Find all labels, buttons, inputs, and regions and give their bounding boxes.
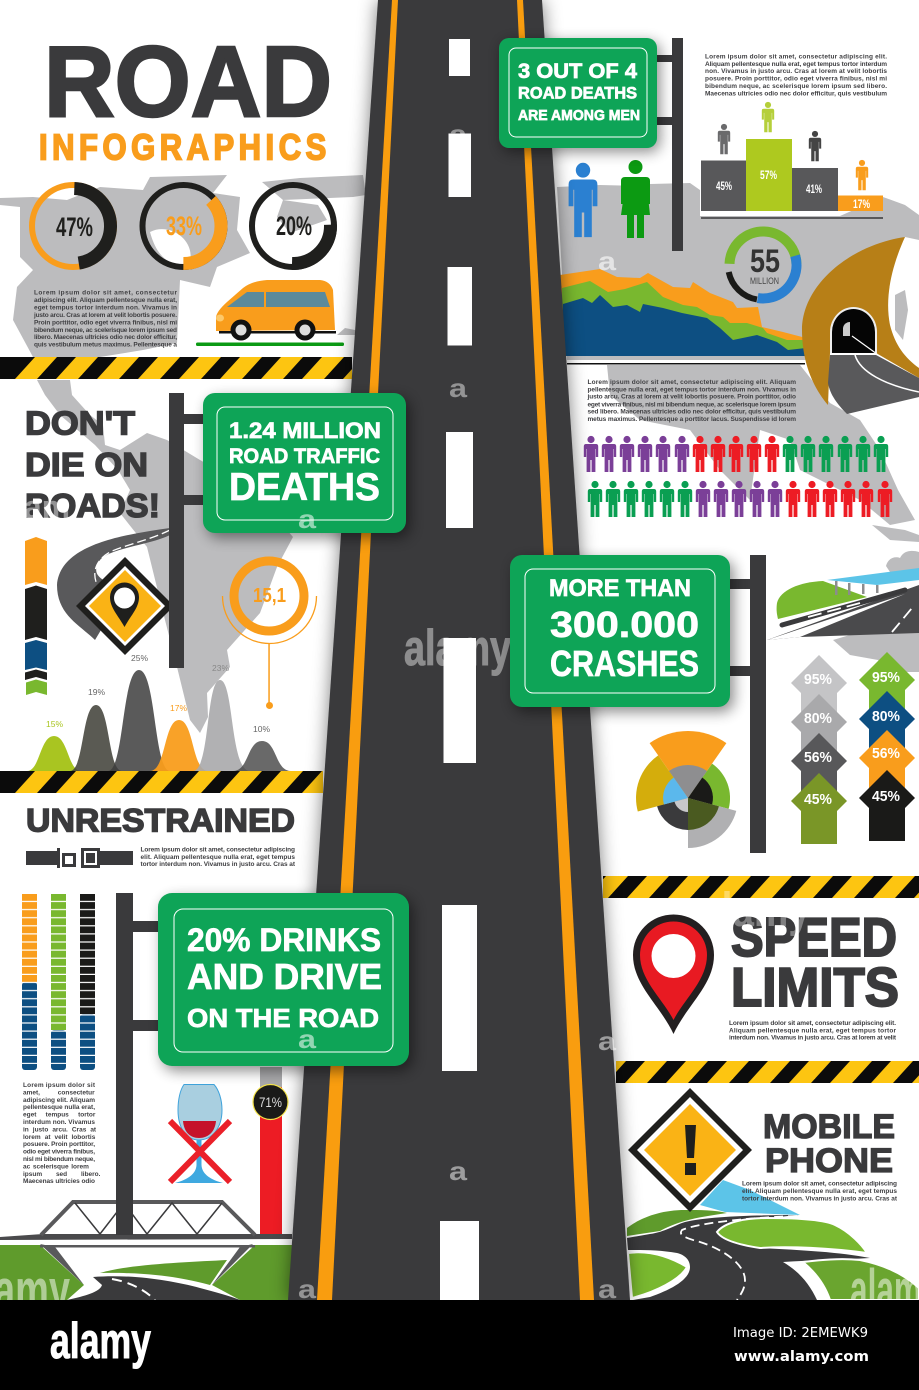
text block: unrestrained: Lorem ipsum dolor sit amet, consectetur adipiscing xyxy=(140,846,295,854)
podium bar chart xyxy=(701,102,883,219)
donut: 55 million xyxy=(722,224,804,306)
road centre line xyxy=(681,1216,797,1300)
text block: under bars: in justo arcu. Cras at xyxy=(23,1126,97,1133)
arrow column: grey: 95% xyxy=(804,671,832,688)
chart value labels: 17% xyxy=(170,703,187,713)
watermarks: a xyxy=(598,1274,617,1304)
hazard band 4 xyxy=(616,1061,919,1083)
watermarks: alamy xyxy=(404,620,511,676)
donut 33%: 33% xyxy=(166,211,202,241)
text block: top right: posuere. Proin porttitor, odio eget viverra finibus, nisl mi xyxy=(705,76,887,82)
heading: MOBILE PHONE: MOBILE xyxy=(763,1108,895,1146)
sign post 1 xyxy=(655,38,683,251)
heading: INFOGRAPHICS: INFOGRAPHICS xyxy=(39,128,326,168)
sign post 2 xyxy=(169,393,205,668)
donut 20%: 20% xyxy=(276,211,312,241)
road surface xyxy=(627,1215,870,1300)
podium people xyxy=(718,102,868,190)
watermarks: am xyxy=(24,489,70,525)
pictogram row 2 xyxy=(588,481,892,517)
hazard band 3 xyxy=(603,876,919,898)
left green bank xyxy=(0,1245,84,1300)
text block: unrestrained: elit. Aliquam pellentesque nulla erat, eget tempus xyxy=(140,854,295,861)
text block: top right: bibendum neque, ac scelerisque lorem ipsum sed libero. xyxy=(705,83,887,90)
hazard band 1 xyxy=(0,357,352,379)
arrow column: grey: 45% xyxy=(804,791,832,808)
text block: middle right xyxy=(586,379,796,423)
right green bank xyxy=(212,1245,292,1300)
text block: donut caption: justo arcu. Cras at lorem at velit lobortis posuere. xyxy=(33,312,177,319)
road shadow xyxy=(288,0,630,1300)
arrow column: colour: 45% xyxy=(872,788,900,805)
heading: DON'T DIE ON ROADS: DIE ON xyxy=(25,447,148,484)
text block: under bars: posuere. Proin porttitor, xyxy=(23,1141,95,1148)
text block: speed limits xyxy=(729,1020,897,1042)
donut: 55 million: MILLION xyxy=(750,276,779,287)
podium percent labels: 45% xyxy=(716,179,732,193)
chart value labels xyxy=(46,653,270,734)
sign: 3 out of 4 xyxy=(499,38,660,152)
sign: 20% drinks: a xyxy=(298,1024,317,1054)
icon: crossed wine glass xyxy=(170,1084,230,1183)
sign: 20% drinks: AND DRIVE xyxy=(187,956,382,997)
heading: SPEED LIMITS xyxy=(731,906,899,1018)
text block: top right: Lorem ipsum dolor sit amet, consectetur adipiscing elit. xyxy=(705,54,887,60)
icon: orange van xyxy=(196,280,344,346)
left hill xyxy=(628,1252,687,1298)
sign: 1.24 million: ROAD TRAFFIC xyxy=(229,445,380,468)
text block: under bars: ipsum sed libero. xyxy=(23,1171,101,1178)
sign post 4 xyxy=(116,893,160,1235)
text block: under bars: Lorem ipsum dolor sit xyxy=(23,1082,96,1089)
watermarks: alamy xyxy=(700,884,810,937)
hazard band 2 xyxy=(0,771,323,793)
footer bar: alamy xyxy=(50,1313,151,1369)
sign: 300.000 crashes: MORE THAN xyxy=(549,575,691,602)
watermarks: a xyxy=(298,1274,317,1304)
centre dashes xyxy=(440,39,479,1300)
sign: 1.24 million: 1.24 MILLION xyxy=(229,418,381,443)
icon: location diamond sign xyxy=(76,557,174,655)
text block: under bars: Maecenas ultricies odio xyxy=(23,1178,95,1185)
text block: mobile phone: elit. Aliquam pellentesque nulla erat, eget tempus xyxy=(742,1188,897,1195)
chart value labels: 15% xyxy=(46,719,63,729)
text block: middle right: sed libero. Maecenas ultricies odio nec dolor efficitur, quis vestibulum xyxy=(588,409,796,416)
text block: mobile phone: Lorem ipsum dolor sit amet, consectetur adipiscing xyxy=(742,1180,897,1188)
donut: 55 million: 55 xyxy=(750,243,780,279)
arrow column: grey xyxy=(791,655,847,844)
sign: 20% drinks xyxy=(158,893,413,1071)
arrow column: grey: 80% xyxy=(804,710,832,727)
sign: 20% drinks: 20% DRINKS xyxy=(187,922,381,958)
text block: donut caption: Proin porttitor, odio eget viverra finibus, nisl mi xyxy=(34,320,177,326)
curved road behind sign xyxy=(57,528,170,640)
icon: red map pin xyxy=(633,914,714,1034)
text block: donut caption xyxy=(33,290,177,348)
podium percent labels: 41% xyxy=(806,182,822,196)
text block: donut caption: libero. Maecenas ultricies odio nec dolor efficitur, xyxy=(34,334,177,341)
text block: speed limits: interdum non. Vivamus in justo arcu. Cras at lorem at velit xyxy=(729,1035,897,1042)
area chart xyxy=(560,269,806,364)
bar: 71% xyxy=(253,1067,288,1239)
watermarks: a xyxy=(449,119,468,149)
text block: top right: non. Vivamus in justo arcu. Cras at lorem at velit lobortis xyxy=(705,68,887,75)
upper hill xyxy=(627,1210,727,1236)
donut 33% xyxy=(130,173,237,279)
peak area chart xyxy=(27,653,291,771)
centre hill xyxy=(100,1260,227,1285)
heading: DON'T DIE ON ROADS: DON'T xyxy=(25,406,136,442)
heading: MOBILE PHONE: PHONE xyxy=(765,1142,893,1180)
footer bar xyxy=(0,1300,919,1390)
arrow column: colour: 95% xyxy=(872,669,900,686)
arrow column: grey: 56% xyxy=(804,749,832,766)
sign: 1.24 million: DEATHS xyxy=(229,466,380,509)
sign: 1.24 million xyxy=(203,393,410,538)
text block: unrestrained: tortor interdum non. Vivamus in justo arcu. Cras at xyxy=(140,861,296,868)
white inlet on the map xyxy=(150,229,191,264)
bridge struts xyxy=(40,1244,84,1285)
bar 17% xyxy=(838,196,883,211)
text block: under bars: ac scelerisque lorem xyxy=(23,1163,89,1170)
road under bridge xyxy=(67,1276,240,1300)
bottom left landscape with truss bridge xyxy=(0,1202,292,1300)
illustration: tunnel xyxy=(802,237,919,414)
donut 20% xyxy=(252,185,334,267)
text block: under bars: pellentesque nulla erat, xyxy=(23,1104,95,1111)
text block: under bars: adipiscing elit. Aliquam xyxy=(23,1097,95,1104)
icon: seat belt xyxy=(26,848,133,868)
bar 41% xyxy=(792,168,838,211)
text block: donut caption: Lorem ipsum dolor sit amet, consectetur xyxy=(34,290,177,296)
bar 45% xyxy=(701,160,746,211)
text block: speed limits: Aliquam pellentesque nulla erat, eget tempus tortor xyxy=(729,1027,896,1034)
middle hill xyxy=(717,1218,867,1253)
icon: man and woman xyxy=(569,160,650,238)
heading: DON'T DIE ON ROADS xyxy=(25,406,160,525)
sign: 1.24 million: a xyxy=(298,504,317,534)
text block: under bars: interdum non. Vivamus xyxy=(23,1119,95,1126)
text block: middle right: pellentesque nulla erat, eget tempus tortor interdum non. Vivamus in xyxy=(588,386,796,393)
river xyxy=(700,1180,800,1215)
heading: MOBILE PHONE xyxy=(763,1108,895,1180)
chevron stacked bar xyxy=(25,537,47,695)
text block: middle right: justo arcu. Cras at lorem at velit lobortis posuere. Proin porttitor, odio xyxy=(586,394,796,401)
callout: 15,1 gauge xyxy=(222,561,316,709)
text block: top right: Maecenas ultricies odio nec dolor efficitur, quis vestibulum xyxy=(705,90,887,97)
sign: 300.000 crashes: 300.000 xyxy=(550,604,699,645)
text block: middle right: Lorem ipsum dolor sit amet, consectetur adipiscing elit. Aliquam xyxy=(588,379,796,386)
sign post 3 xyxy=(728,555,766,853)
text block: under bars: eget tempus tortor xyxy=(23,1112,96,1119)
arrow column: colour: 80% xyxy=(872,708,900,725)
sign: 3 out of 4: ARE AMONG MEN xyxy=(518,107,640,124)
sign: 20% drinks: ON THE ROAD xyxy=(187,1003,379,1033)
heading: SPEED LIMITS: LIMITS xyxy=(731,956,899,1018)
text block: under bars: amet, consectetur xyxy=(23,1089,95,1096)
pictogram row 1 xyxy=(584,436,888,472)
text block: under bars: lorem at velit lobortis xyxy=(23,1134,96,1141)
text block: under bars: nisl mi bibendum neque, xyxy=(23,1156,95,1163)
arrow column: colour: 56% xyxy=(872,745,900,762)
sign: 3 out of 4: 3 OUT OF 4 xyxy=(518,60,637,83)
sign: 3 out of 4: ROAD DEATHS xyxy=(518,84,637,102)
arrow column: colour xyxy=(859,652,915,841)
watermarks: a xyxy=(598,1026,617,1056)
sign: 300.000 crashes: CRASHES xyxy=(550,643,699,684)
donut 47% xyxy=(32,185,114,267)
heading: UNRESTRAINED: UNRESTRAINED xyxy=(26,802,295,838)
text block: under bars xyxy=(23,1082,101,1185)
footer bar: www.alamy.com xyxy=(734,1349,869,1365)
illustration: highway overpass xyxy=(767,568,919,640)
podium percent labels: 57% xyxy=(760,168,777,182)
text block: mobile phone: tortor interdum non. Vivamus in justo arcu. Cras at xyxy=(742,1195,898,1202)
right yellow line xyxy=(517,0,594,1300)
text block: donut caption: eget tempus tortor interdum non. Vivamus in xyxy=(34,304,177,312)
heading: DON'T DIE ON ROADS: ROADS! xyxy=(25,488,160,525)
diamond warning sign xyxy=(628,1088,752,1212)
heading: SPEED LIMITS: SPEED xyxy=(731,906,897,968)
text block: donut caption: adipiscing elit. Aliquam pellentesque nulla erat, xyxy=(34,297,177,304)
heading: ROAD: ROAD xyxy=(44,26,332,138)
podium percent labels xyxy=(716,168,870,211)
chart value labels: 23% xyxy=(212,663,229,673)
text block: donut caption: quis vestibulum metus maximus. Pellentesque a xyxy=(34,342,177,348)
pictogram rows xyxy=(584,436,892,517)
watermarks: a xyxy=(449,373,468,403)
bar 57% xyxy=(746,139,792,211)
text block: unrestrained xyxy=(140,846,296,868)
text block: under bars: odio eget viverra finibus, xyxy=(23,1149,95,1156)
chart value labels: 19% xyxy=(88,687,105,697)
watermarks: a xyxy=(449,1156,468,1186)
sign: 300.000 crashes xyxy=(510,555,734,712)
watermarks: a xyxy=(598,246,617,276)
segmented bars xyxy=(20,894,98,1070)
footer bar: Image ID: 2EMEWK9 xyxy=(733,1326,868,1341)
text block: top right xyxy=(705,54,887,97)
chart value labels: 25% xyxy=(131,653,148,663)
donut 47%: 47% xyxy=(56,212,93,242)
text block: middle right: metus maximus. Pellentesque a porttitor lacus. Suspendisse id lorem xyxy=(588,416,796,423)
chart value labels: 10% xyxy=(253,724,270,734)
text block: donut caption: bibendum neque, ac scelerisque lorem ipsum sed xyxy=(34,327,177,334)
donut charts xyxy=(32,173,334,279)
rose chart xyxy=(636,731,736,848)
text block: speed limits: Lorem ipsum dolor sit amet, consectetur adipiscing elit. xyxy=(729,1020,896,1027)
title xyxy=(39,26,332,168)
text block: middle right: eget viverra finibus, nisl mi bibendum neque, ac scelerisque lorem ipsum xyxy=(588,401,796,408)
text block: mobile phone xyxy=(742,1180,898,1202)
main road xyxy=(288,0,630,1300)
bar: 71%: 71% xyxy=(259,1094,282,1110)
podium percent labels: 17% xyxy=(853,197,870,211)
left yellow line xyxy=(317,0,398,1300)
lower hill xyxy=(803,1259,919,1300)
illustration: winding road landscape xyxy=(627,1180,919,1300)
callout: 15,1 gauge: 15,1 xyxy=(253,585,286,607)
world map: grey backdrop xyxy=(0,175,919,733)
truss xyxy=(41,1202,255,1235)
text block: top right: Aliquam pellentesque nulla erat, eget tempus tortor interdum xyxy=(705,61,887,68)
bridge deck xyxy=(0,1234,292,1240)
